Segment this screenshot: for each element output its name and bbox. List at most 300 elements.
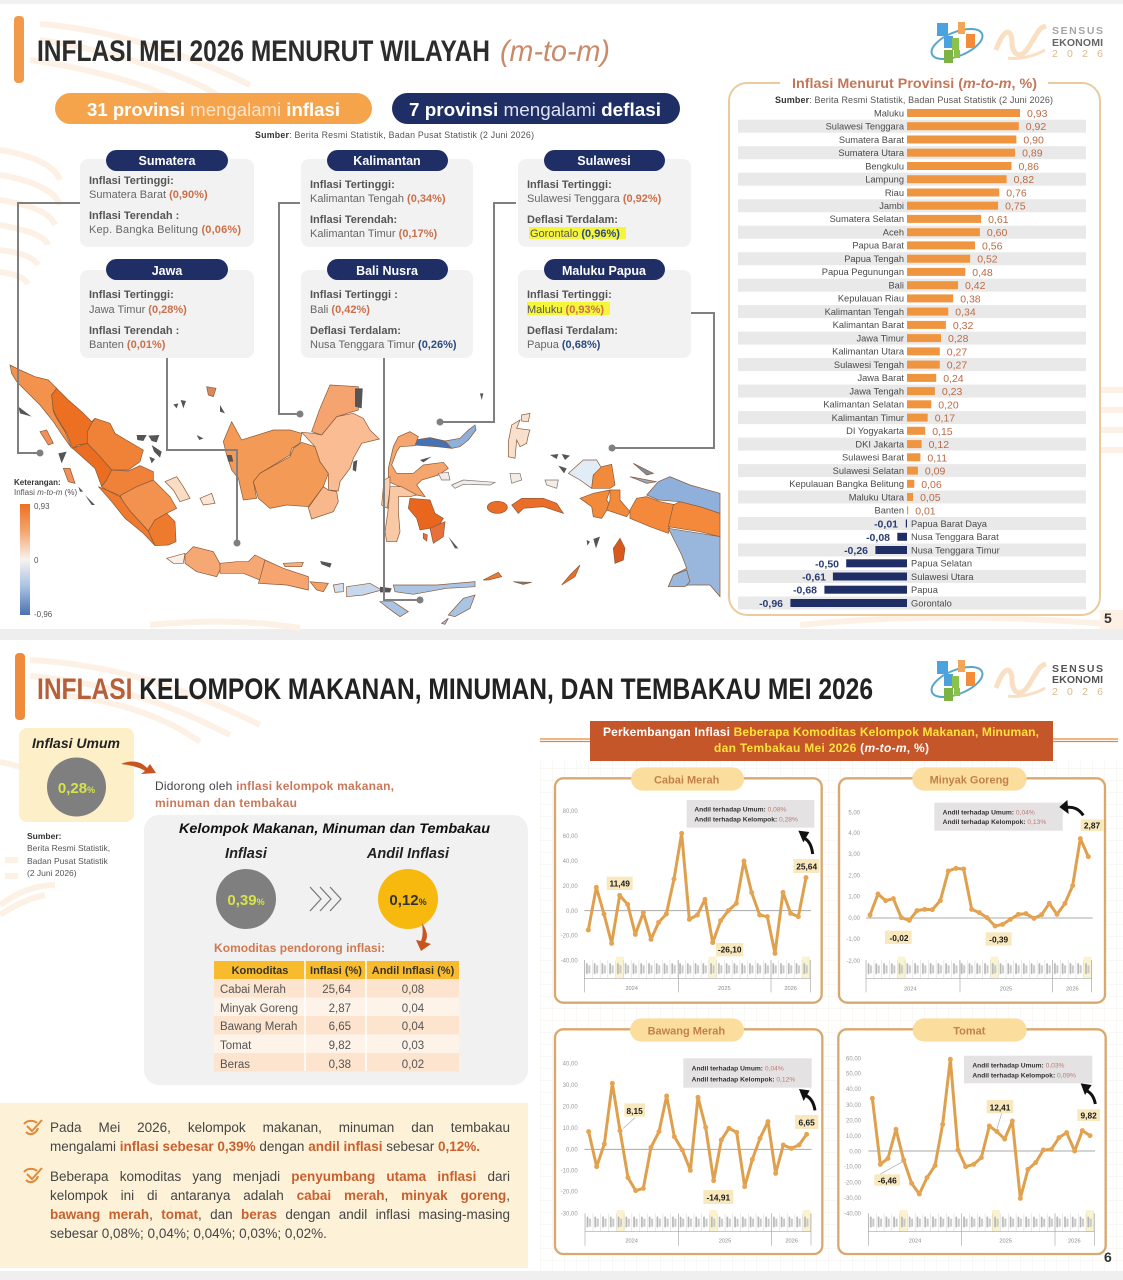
title: inflasi kelompok makanan: INFLASI KELOMPOK MAKANAN, MINUMAN, DAN TEMBAKAU MEI 2026	[37, 673, 873, 706]
table: komoditas: 0,02	[402, 1059, 424, 1071]
driver text: Didorong oleh inflasi kelompok makanan,	[155, 779, 394, 793]
province labels: Sumatera Utara	[838, 148, 905, 158]
legend: Inflasi m-to-m (%)	[14, 488, 77, 497]
source: inflasi umum	[27, 831, 110, 878]
y axis: -10,00	[561, 1169, 578, 1175]
panel: Sumatera: Sumatera Barat (0,90%)	[89, 189, 208, 201]
table: komoditas: Minyak Goreng	[220, 1003, 298, 1015]
province labels: Jawa Barat	[857, 373, 904, 383]
table: komoditas: Andil Inflasi (%)	[372, 965, 455, 977]
data line	[870, 839, 1088, 926]
bar values: 0,86	[1018, 161, 1039, 173]
page number 5: 5	[1104, 610, 1112, 626]
x axis	[585, 1210, 812, 1246]
panel: Sulawesi: Gorontalo (0,96%)	[530, 228, 620, 240]
arrow	[1081, 1083, 1095, 1104]
y axis: 20,00	[563, 1104, 578, 1110]
panel: Jawa: Inflasi Terendah :	[89, 325, 179, 337]
province labels	[789, 108, 1000, 608]
panel: Sulawesi: Sulawesi Tenggara (0,92%)	[527, 193, 662, 205]
bar values: 0,01	[915, 505, 936, 517]
y axis: 10,00	[846, 1134, 862, 1140]
panel: kelompok makanan minuman tembakau	[144, 815, 528, 1085]
icon: check 2	[24, 1168, 42, 1182]
table: komoditas: Cabai Merah	[220, 984, 286, 996]
panel: Sumatera: Sumatera	[139, 154, 197, 168]
chart: Cabai Merah	[555, 767, 822, 1003]
chart: Bawang Merah	[555, 1018, 822, 1254]
x axis: 2024	[904, 987, 917, 993]
province labels: Papua	[911, 585, 939, 595]
logo: BPS and Sensus Ekonomi 2026 (slide 1): EKONOMI	[1052, 37, 1103, 49]
logo: BPS and Sensus Ekonomi 2026 (slide 2): EKONOMI	[1052, 674, 1103, 686]
panel: narrative text	[0, 1103, 528, 1268]
labels	[885, 819, 1103, 946]
icon: chevrons	[310, 887, 341, 911]
bar values: 0,76	[1006, 188, 1027, 200]
province labels: DI Yogyakarta	[846, 426, 905, 436]
connector: Kalimantan	[279, 203, 304, 418]
y axis: 0,00	[566, 1147, 578, 1153]
y axis: 40,00	[563, 859, 578, 865]
bar values: 0,11	[927, 452, 947, 464]
bar values: -0,08	[866, 532, 890, 544]
slide 1 accent bar	[14, 16, 24, 83]
arrow	[799, 1089, 815, 1110]
callout: andil: Andil terhadap Kelompok: 0,13%	[943, 819, 1046, 826]
x axis: 2026	[785, 1239, 798, 1245]
data line	[872, 1059, 1090, 1198]
chart title: Cabai Merah	[631, 767, 744, 791]
callout: andil: Andil terhadap Kelompok: 0,12%	[692, 1076, 795, 1083]
y axis: 0,00	[849, 1150, 862, 1156]
x axis	[866, 957, 1093, 993]
province labels: Jawa Timur	[856, 333, 904, 343]
table: komoditas: 0,03	[402, 1040, 424, 1052]
y axis: 0,00	[566, 909, 578, 915]
bar values: 0,52	[977, 254, 998, 266]
y axis: 80,00	[563, 809, 578, 815]
connector: Maluku Papua	[608, 313, 714, 452]
panel: Jawa: Banten (0,01%)	[89, 339, 166, 351]
legend	[14, 478, 77, 619]
labels: 11,49	[609, 879, 630, 889]
arrow	[798, 831, 813, 854]
narrative paragraph 1: mengalami inflasi sebesar 0,39% dengan andil inflasi sebesar 0,12%.	[50, 1139, 480, 1154]
table: komoditas: 0,08	[402, 984, 424, 996]
table: komoditas: 0,04	[402, 1021, 425, 1033]
panel: Sulawesi	[518, 150, 691, 247]
province labels: Bali	[888, 280, 904, 290]
bar values: 0,60	[987, 227, 1007, 239]
inflasi metric	[216, 846, 276, 929]
panel: Sulawesi: Deflasi Terdalam:	[527, 214, 618, 226]
driver text	[155, 779, 394, 810]
province labels: Papua Tengah	[844, 254, 904, 264]
bar values: 0,09	[925, 466, 945, 478]
source: inflasi umum: Berita Resmi Statistik,	[27, 843, 110, 853]
table: komoditas: Inflasi (%)	[310, 965, 362, 977]
panel: Bali Nusra	[301, 259, 473, 358]
panel: Kalimantan	[301, 150, 473, 247]
y axis	[561, 1061, 578, 1217]
source: inflasi umum: Badan Pusat Statistik	[27, 856, 109, 866]
y axis: 10,00	[563, 1126, 578, 1132]
y axis: 40,00	[563, 1061, 578, 1067]
bar values: 0,15	[932, 426, 953, 438]
province labels: Gorontalo	[911, 598, 952, 608]
bar values: -0,96	[759, 598, 783, 610]
chart: Minyak Goreng	[839, 767, 1105, 1003]
chart title: Cabai Merah: Cabai Merah	[654, 775, 720, 787]
callout: andil: Andil terhadap Umum: 0,04%	[943, 809, 1035, 816]
y axis: 20,00	[846, 1118, 862, 1124]
callout: andil	[687, 800, 814, 828]
province labels: Papua Barat Daya	[911, 519, 988, 529]
panel: Jawa: Jawa Timur (0,28%)	[89, 304, 187, 316]
callout: andil: Andil terhadap Umum: 0,08%	[694, 807, 787, 814]
bar values: 0,12	[929, 439, 949, 451]
y axis	[846, 810, 861, 965]
chart title: Tomat: Tomat	[953, 1026, 986, 1038]
arrow: andil down	[416, 923, 431, 951]
data line	[588, 833, 806, 953]
labels	[623, 1103, 818, 1204]
negative bars	[790, 520, 907, 607]
chart title: Bawang Merah	[630, 1018, 744, 1042]
bar values: 0,20	[938, 399, 959, 411]
chart title: Bawang Merah: Bawang Merah	[648, 1026, 725, 1038]
province labels: Papua Selatan	[911, 559, 972, 569]
komoditas heading: Komoditas pendorong inflasi:	[214, 941, 385, 955]
inflasi metric: 0,39%	[227, 892, 265, 909]
card: inflasi umum: Inflasi Umum	[32, 735, 120, 751]
bar values: 0,06	[921, 479, 942, 491]
labels: -0,02	[890, 933, 909, 943]
andil inflasi metric	[366, 846, 450, 929]
y axis: 30,00	[846, 1103, 862, 1109]
narrative paragraph 2	[50, 1167, 510, 1247]
slide 2 accent bar	[15, 653, 25, 720]
callout: andil	[683, 1058, 812, 1088]
panel: inflasi menurut provinsi bar chart	[729, 74, 1100, 615]
x axis: 2026	[784, 986, 797, 992]
y axis: 60,00	[563, 834, 578, 840]
panel: Maluku Papua	[518, 259, 691, 358]
labels: -14,91	[707, 1192, 731, 1202]
y axis: -1,00	[846, 937, 861, 943]
table: komoditas: 25,64	[322, 984, 352, 996]
x axis: 2026	[1066, 987, 1079, 993]
labels: 25,64	[796, 861, 817, 871]
bar values: 0,32	[953, 320, 973, 332]
province labels: Kalimantan Selatan	[823, 400, 904, 410]
y axis: -40,00	[561, 959, 578, 965]
province labels: Kalimantan Utara	[832, 347, 905, 357]
pill: 31 provinsi inflasi	[55, 93, 372, 124]
chart title: Minyak Goreng: Minyak Goreng	[930, 775, 1009, 787]
source line: Sumber: Berita Resmi Statistik, Badan Pusat Statistik (2 Juni 2026)	[255, 130, 534, 140]
x axis: 2025	[718, 986, 731, 992]
panel: Maluku Papua: Papua (0,68%)	[527, 339, 601, 351]
narrative paragraph 2: bawang merah, tomat, dan beras dengan andil inflasi masing-masing	[50, 1207, 510, 1222]
y axis: 30,00	[563, 1083, 578, 1089]
callout: andil: Andil terhadap Umum: 0,04%	[692, 1066, 784, 1073]
labels: -0,39	[989, 934, 1009, 944]
alternating row stripes	[738, 120, 1086, 609]
map: eastern Indonesia	[380, 393, 720, 624]
callout: andil: Andil terhadap Kelompok: 0,09%	[972, 1073, 1076, 1080]
y axis: -20,00	[844, 1180, 862, 1186]
bar values: 0,27	[947, 360, 967, 372]
x axis: 2024	[909, 1239, 921, 1245]
bar values: 0,27	[947, 346, 967, 358]
logo: BPS and Sensus Ekonomi 2026 (slide 2)	[927, 660, 1103, 703]
x axis: 2025	[719, 1239, 731, 1245]
bar values: 0,42	[965, 280, 986, 292]
decorative header rule	[540, 739, 1118, 742]
y axis: 2,00	[848, 873, 861, 879]
arrow: inflasi umum to driver text	[121, 761, 156, 774]
labels: 12,41	[990, 1103, 1011, 1113]
province labels: Banten	[875, 506, 904, 516]
table: komoditas: 2,87	[329, 1003, 351, 1015]
province labels: Kepulauan Riau	[838, 294, 904, 304]
page number 6: 6	[1104, 1249, 1112, 1265]
icon: check 1	[24, 1120, 42, 1134]
y axis: 0,00	[848, 916, 861, 922]
province labels: Maluku Utara	[849, 492, 905, 502]
bar values: 0,24	[943, 373, 964, 385]
table: komoditas	[214, 961, 459, 1072]
map of Indonesia	[10, 365, 720, 624]
y axis	[844, 1056, 862, 1217]
callout: andil: Andil terhadap Umum: 0,03%	[972, 1063, 1065, 1070]
bar values: -0,26	[844, 545, 868, 557]
inflasi metric: Inflasi	[225, 846, 268, 862]
bar values: 0,93	[1027, 108, 1048, 120]
province labels: Lampung	[865, 174, 904, 184]
bar values: 0,75	[1005, 201, 1026, 213]
table: komoditas: Komoditas	[232, 965, 288, 977]
panel: Kalimantan: Inflasi Terendah:	[310, 214, 397, 226]
logo: BPS and Sensus Ekonomi 2026 (slide 2): 2026	[1052, 686, 1103, 698]
logo: BPS and Sensus Ekonomi 2026 (slide 1)	[927, 22, 1103, 65]
chart section header: dan Tembakau Mei 2026 (m-to-m, %)	[714, 741, 929, 755]
narrative paragraph 2: sebesar 0,08%; 0,04%; 0,04%; 0,03%; 0,02%.	[50, 1226, 327, 1241]
panel title: Inflasi Menurut Provinsi ( m-to-m, %)	[792, 75, 1037, 91]
bar values: -0,61	[802, 572, 826, 584]
table: komoditas: Beras	[220, 1059, 250, 1071]
card: inflasi umum: 0,28%	[58, 780, 95, 797]
labels: 6,65	[799, 1117, 815, 1127]
panel: Sumatera: Kep. Bangka Belitung (0,06%)	[89, 224, 241, 236]
province labels: Nusa Tenggara Barat	[911, 532, 999, 542]
table: komoditas: 6,65	[329, 1021, 351, 1033]
chart: Tomat	[838, 1018, 1106, 1254]
x axis	[584, 957, 811, 992]
panel: Sulawesi: Inflasi Tertinggi:	[527, 179, 612, 191]
labels	[874, 1100, 1100, 1186]
x axis: 2024	[625, 1239, 638, 1245]
labels: 2,87	[1084, 821, 1100, 831]
andil inflasi metric: Andil Inflasi	[366, 846, 450, 862]
panel source: Sumber: Berita Resmi Statistik, Badan Pusat Statistik (2 Juni 2026)	[775, 95, 1053, 105]
legend: 0,93	[34, 502, 50, 511]
callout: andil: Andil terhadap Kelompok: 0,28%	[694, 817, 798, 824]
panel: Bali Nusra: Inflasi Tertinggi :	[310, 289, 398, 301]
pill: 7 provinsi deflasi	[392, 93, 680, 124]
bar values	[759, 108, 1048, 610]
panel: Kalimantan: Kalimantan	[353, 154, 421, 168]
callout: andil	[934, 803, 1063, 831]
province labels: Kalimantan Timur	[832, 413, 904, 423]
source: inflasi umum: (2 Juni 2026)	[27, 868, 77, 878]
panel: Bali Nusra: Bali (0,42%)	[310, 304, 370, 316]
panel: Maluku Papua: Deflasi Terdalam:	[527, 325, 618, 337]
x axis: 2024	[625, 986, 638, 992]
table: komoditas: 0,38	[329, 1059, 351, 1071]
province labels: Sulawesi Barat	[842, 453, 904, 463]
province labels: Nusa Tenggara Timur	[911, 545, 1000, 555]
province labels: Papua Pegunungan	[822, 267, 904, 277]
y axis: -20,00	[561, 1190, 578, 1196]
title: inflasi menurut wilayah: (m-to-m)	[500, 35, 610, 68]
panel: Sumatera	[80, 150, 254, 247]
panel: Jawa: Inflasi Tertinggi:	[89, 289, 174, 301]
connector: Sulawesi	[436, 203, 516, 426]
panel: Kalimantan: Inflasi Tertinggi:	[310, 179, 395, 191]
logo: BPS and Sensus Ekonomi 2026 (slide 1): 2026	[1052, 48, 1103, 60]
card: inflasi umum	[19, 728, 134, 822]
table: komoditas: 0,04	[402, 1003, 425, 1015]
bar values: 0,05	[920, 492, 941, 504]
bar values: -0,50	[815, 558, 839, 570]
province labels: DKI Jakarta	[855, 439, 905, 449]
province labels: Sulawesi Selatan	[833, 466, 904, 476]
chart title: Minyak Goreng	[912, 767, 1027, 791]
y axis: 60,00	[846, 1056, 862, 1062]
bar values: 0,28	[948, 333, 969, 345]
y axis: 5,00	[848, 810, 861, 816]
province labels: Riau	[885, 188, 904, 198]
positive bars	[907, 109, 1020, 514]
y axis: -20,00	[561, 934, 578, 940]
bar values: 0,92	[1026, 121, 1046, 133]
y axis: -30,00	[844, 1196, 862, 1202]
bar values: -0,01	[874, 518, 898, 530]
y axis: 1,00	[848, 895, 861, 901]
bar values: 0,38	[960, 293, 981, 305]
arrow	[1059, 800, 1083, 815]
panel: Kalimantan: Kalimantan Timur (0,17%)	[310, 228, 438, 240]
province labels: Bengkulu	[865, 161, 904, 171]
bar values: 0,82	[1014, 174, 1034, 186]
pill: 7 provinsi deflasi: 7 provinsi mengalami deflasi	[409, 100, 661, 120]
panel: Sulawesi: Sulawesi	[577, 154, 631, 168]
province labels: Kalimantan Tengah	[825, 307, 904, 317]
province labels: Sumatera Selatan	[830, 214, 904, 224]
logo: BPS and Sensus Ekonomi 2026 (slide 2): SENSUS	[1052, 663, 1103, 675]
chart section header: Perkembangan Inflasi Beberapa Komoditas Kelompok Makanan, Minuman,	[603, 725, 1039, 739]
bar values: -0,68	[793, 585, 817, 597]
y axis: 3,00	[848, 852, 861, 858]
bar values: 0,23	[942, 386, 962, 398]
table: komoditas: Bawang Merah	[220, 1021, 297, 1033]
driver text: minuman dan tembakau	[155, 796, 297, 810]
panel: Sumatera: Inflasi Terendah :	[89, 210, 179, 222]
province labels: Maluku	[874, 108, 904, 118]
connector: Bali Nusra	[384, 357, 424, 604]
chart section header	[590, 721, 1053, 761]
panel: Jawa: Jawa	[152, 264, 183, 278]
y axis: 50,00	[846, 1072, 862, 1078]
x axis: 2026	[1068, 1239, 1081, 1245]
table: komoditas: Tomat	[220, 1040, 252, 1052]
x axis: 2025	[999, 1239, 1012, 1245]
connector: Sumatera	[18, 203, 80, 456]
map: western Indonesia	[10, 365, 382, 597]
panel: Maluku Papua: Maluku (0,93%)	[527, 304, 604, 316]
province labels: Kepulauan Bangka Belitung	[789, 479, 904, 489]
legend: 0	[34, 556, 39, 565]
bar values: 0,17	[935, 413, 955, 425]
y axis	[561, 809, 578, 965]
y axis: 40,00	[846, 1087, 862, 1093]
province labels: Sulawesi Tenggara	[826, 122, 905, 132]
narrative paragraph 1: Pada Mei 2026, kelompok makanan, minuman dan tembakau	[50, 1120, 510, 1135]
narrative paragraph 1	[50, 1118, 510, 1158]
bar values: 0,61	[988, 214, 1009, 226]
panel heading: Kelompok Makanan, Minuman dan Tembakau	[179, 820, 490, 836]
x axis	[868, 1210, 1095, 1246]
y axis: -2,00	[846, 959, 861, 965]
province labels: Papua Barat	[852, 241, 904, 251]
bar values: 0,34	[955, 307, 976, 319]
panel: Maluku Papua: Maluku Papua	[562, 264, 647, 278]
bar values: 0,56	[982, 240, 1003, 252]
title: inflasi menurut wilayah: INFLASI MEI 2026 MENURUT WILAYAH	[37, 35, 490, 68]
y axis: -30,00	[561, 1211, 578, 1217]
province labels: Jawa Tengah	[849, 386, 904, 396]
y axis: -40,00	[844, 1211, 862, 1217]
y axis: 20,00	[563, 884, 578, 890]
bar values: 0,48	[972, 267, 993, 279]
province labels: Aceh	[883, 228, 904, 238]
source: inflasi umum: Sumber:	[27, 831, 62, 841]
labels: -26,10	[718, 944, 742, 954]
panel: Bali Nusra: Bali Nusra	[356, 264, 419, 278]
y axis: -10,00	[844, 1165, 862, 1171]
pill: 31 provinsi inflasi: 31 provinsi mengalami inflasi	[87, 100, 340, 120]
bar values: 0,89	[1022, 148, 1043, 160]
bar values: 0,90	[1023, 134, 1044, 146]
legend: Keterangan:	[14, 478, 61, 487]
labels: 8,15	[627, 1106, 643, 1116]
panel: Maluku Papua: Inflasi Tertinggi:	[527, 289, 612, 301]
data line	[589, 1083, 807, 1191]
logo: BPS and Sensus Ekonomi 2026 (slide 1): SENSUS	[1052, 25, 1103, 37]
y axis: 4,00	[848, 831, 861, 837]
connector: Jawa	[167, 357, 240, 546]
province labels: Kalimantan Barat	[833, 320, 904, 330]
chart title: Tomat	[913, 1018, 1027, 1042]
narrative paragraph 2: Beberapa komoditas yang menjadi penyumbang utama inflasi dari	[50, 1169, 510, 1184]
legend: -0,96	[34, 610, 53, 619]
callout: andil	[964, 1056, 1092, 1083]
table: komoditas: 9,82	[329, 1040, 351, 1052]
x axis: 2025	[1000, 987, 1012, 993]
